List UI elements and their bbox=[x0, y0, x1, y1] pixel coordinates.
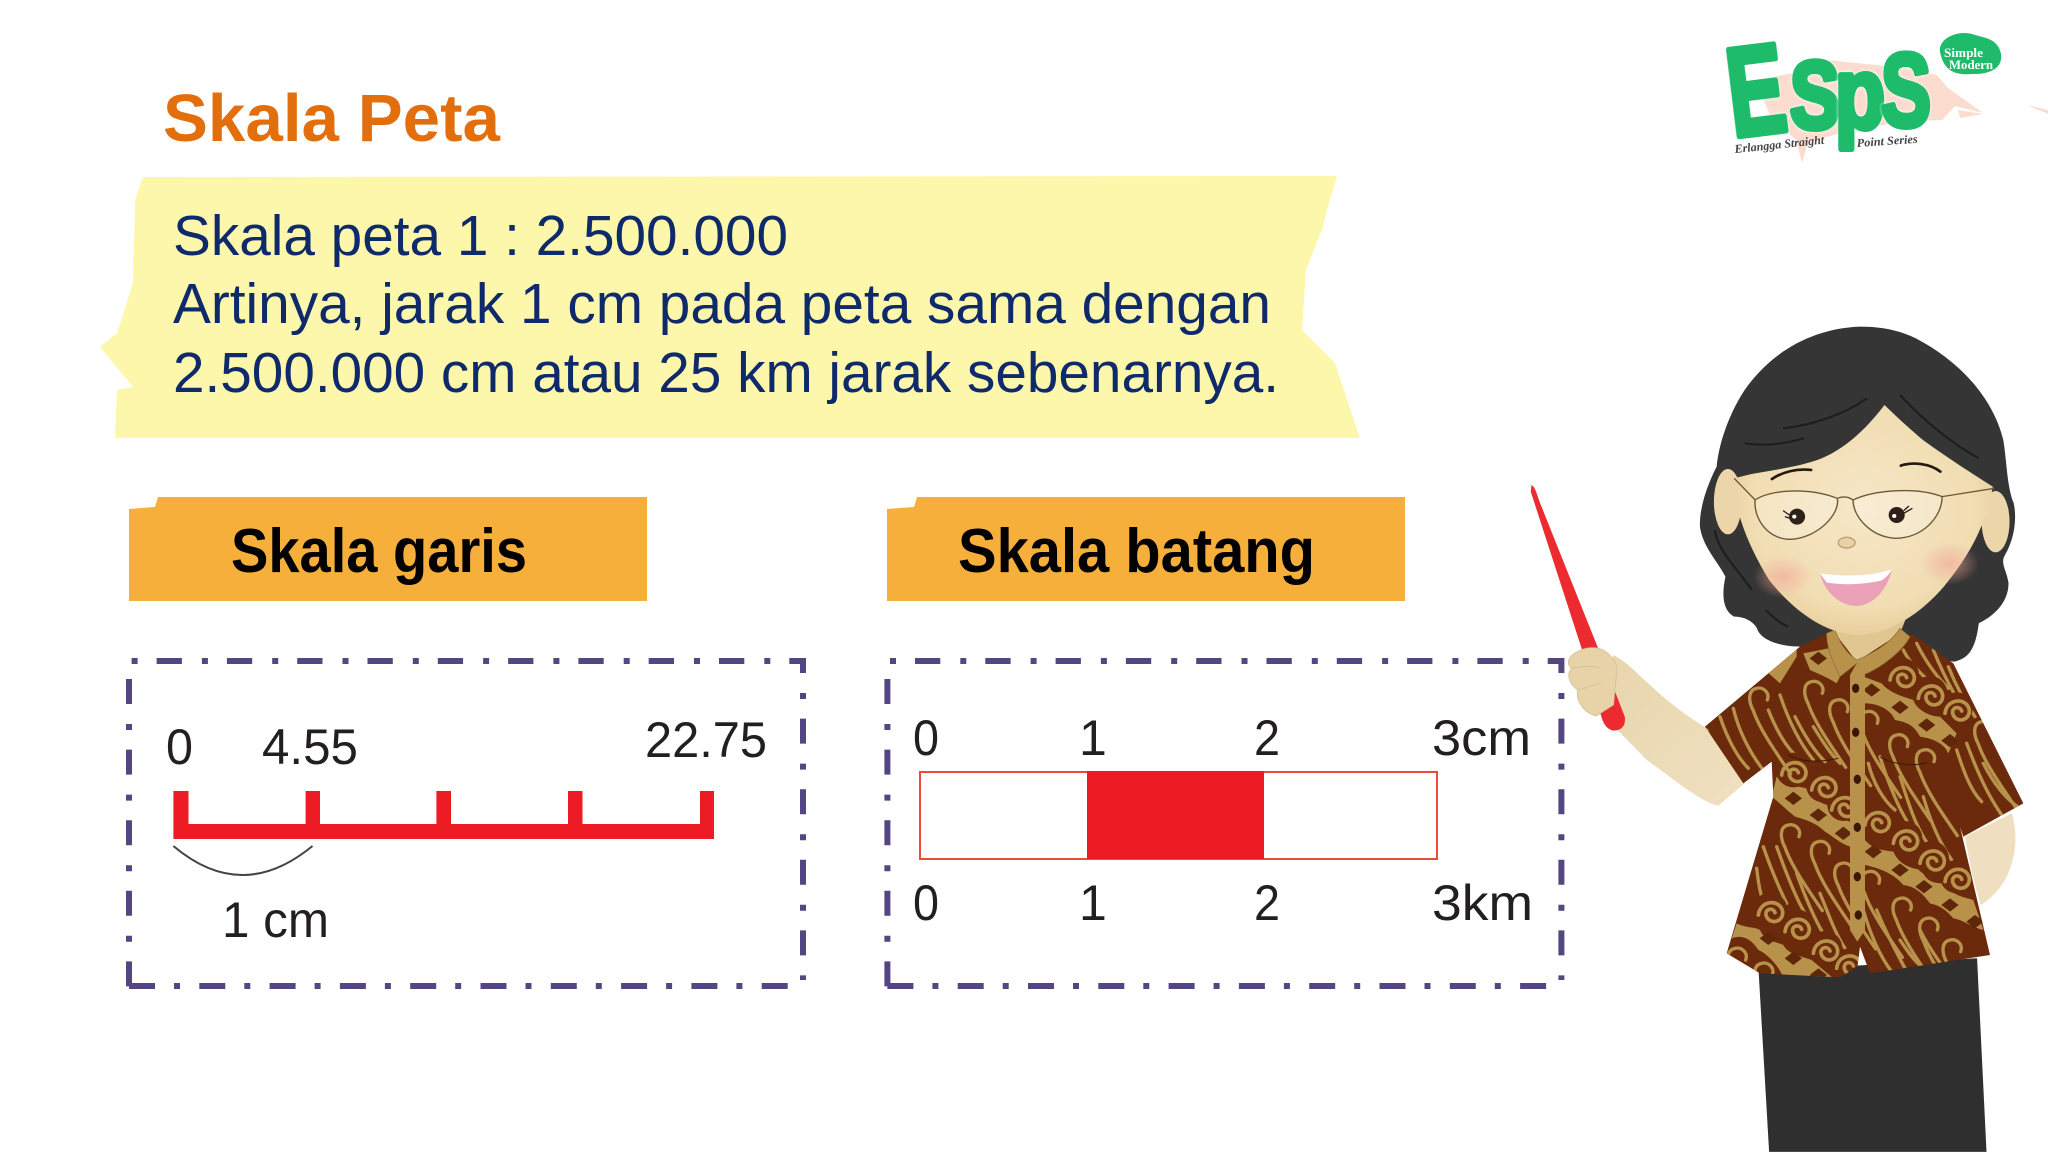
diamonds bbox=[1760, 652, 1984, 982]
character: teacher with pointer bbox=[1531, 327, 2023, 1152]
upper numbers cm: 2 bbox=[1254, 710, 1280, 766]
shirt bbox=[1705, 620, 2024, 978]
logo letter S: S bbox=[1790, 42, 1840, 149]
heading: Skala garis: Skala garis bbox=[231, 517, 527, 586]
heading: Skala batang: Skala batang bbox=[958, 517, 1315, 586]
collar bbox=[1827, 628, 1910, 677]
glasses bbox=[1734, 478, 1995, 539]
head bbox=[1714, 395, 2010, 635]
hair bbox=[1700, 327, 2015, 662]
fist bbox=[1568, 648, 1617, 716]
neck bbox=[1832, 617, 1907, 662]
placket bbox=[1850, 663, 1865, 942]
explanation text: Artinya, jarak 1 cm pada peta sama dengan bbox=[173, 272, 1271, 336]
scale numbers: 0 bbox=[166, 719, 193, 775]
logo letter S: S bbox=[1881, 33, 1931, 149]
logo badge: Modern bbox=[1949, 57, 1994, 72]
eyebrows bbox=[1772, 464, 1940, 479]
ears bbox=[1714, 469, 2010, 552]
skirt bbox=[1759, 958, 1987, 1152]
cheeks bbox=[1753, 542, 1979, 598]
panel: skala garis bbox=[129, 658, 803, 989]
arc 1 cm bbox=[173, 846, 312, 875]
logo tagline: Erlangga Straight bbox=[1733, 133, 1825, 156]
line scale bar bbox=[173, 791, 714, 839]
character back layer: skirt, hair, arms, pointer bbox=[1531, 327, 2015, 1152]
upper numbers cm: 1 bbox=[1079, 710, 1107, 766]
pointer bbox=[1531, 485, 1625, 731]
eyes bbox=[1783, 506, 1912, 525]
yellow torn paper bbox=[100, 176, 1360, 438]
mouth bbox=[1820, 569, 1892, 606]
explanation text: 2.500.000 cm atau 25 km jarak sebenarnya. bbox=[173, 341, 1279, 405]
nose bbox=[1838, 537, 1855, 548]
scale numbers: 4.55 bbox=[262, 719, 358, 775]
hook motifs bbox=[1728, 681, 2016, 1049]
bar scale bbox=[920, 771, 1437, 859]
logo letter E: E bbox=[1719, 16, 1793, 164]
logo splash bbox=[1755, 60, 2048, 163]
tan bands bbox=[1732, 648, 1983, 978]
heading: Skala garis bbox=[129, 497, 647, 601]
shirt buttons bbox=[1852, 684, 1862, 920]
swirl motifs on brown bbox=[1753, 658, 1973, 978]
upper numbers cm: 3cm bbox=[1432, 710, 1531, 766]
lower numbers km: 0 bbox=[913, 875, 939, 931]
left arm bbox=[1600, 655, 1745, 806]
scale numbers: 1 cm bbox=[222, 892, 329, 948]
heading: Skala batang bbox=[887, 497, 1405, 601]
explanation text bbox=[173, 204, 1279, 405]
hair strands bbox=[1715, 395, 1979, 627]
right arm bbox=[1965, 813, 2015, 905]
logo: ESPS Simple Modern bbox=[1719, 16, 2048, 164]
lower numbers km: 3km bbox=[1432, 875, 1533, 931]
logo tagline: Point Series bbox=[1856, 132, 1918, 150]
shirt batik pattern bbox=[1706, 642, 2020, 977]
upper numbers cm bbox=[913, 710, 1531, 766]
face bbox=[1733, 405, 1993, 635]
logo badge: Simple bbox=[1944, 45, 1983, 60]
upper numbers cm: 0 bbox=[913, 710, 939, 766]
fine curved lines bbox=[1707, 643, 2020, 972]
shirt base bbox=[1705, 633, 2023, 977]
explanation text: Skala peta 1 : 2.500.000 bbox=[173, 204, 788, 268]
logo badge bbox=[1940, 33, 2001, 74]
yellow note panel bbox=[100, 176, 1360, 438]
lower numbers km: 1 bbox=[1079, 875, 1107, 931]
panel: skala batang bbox=[887, 658, 1561, 989]
lower numbers km: 2 bbox=[1254, 875, 1280, 931]
logo letter p: p bbox=[1835, 38, 1885, 150]
logo tagline bbox=[1733, 132, 1918, 156]
pocket lines bbox=[1788, 755, 1927, 765]
scale numbers bbox=[166, 712, 767, 948]
title: Skala Peta bbox=[163, 81, 501, 156]
lower numbers km bbox=[913, 875, 1533, 931]
scale numbers: 22.75 bbox=[645, 712, 767, 768]
